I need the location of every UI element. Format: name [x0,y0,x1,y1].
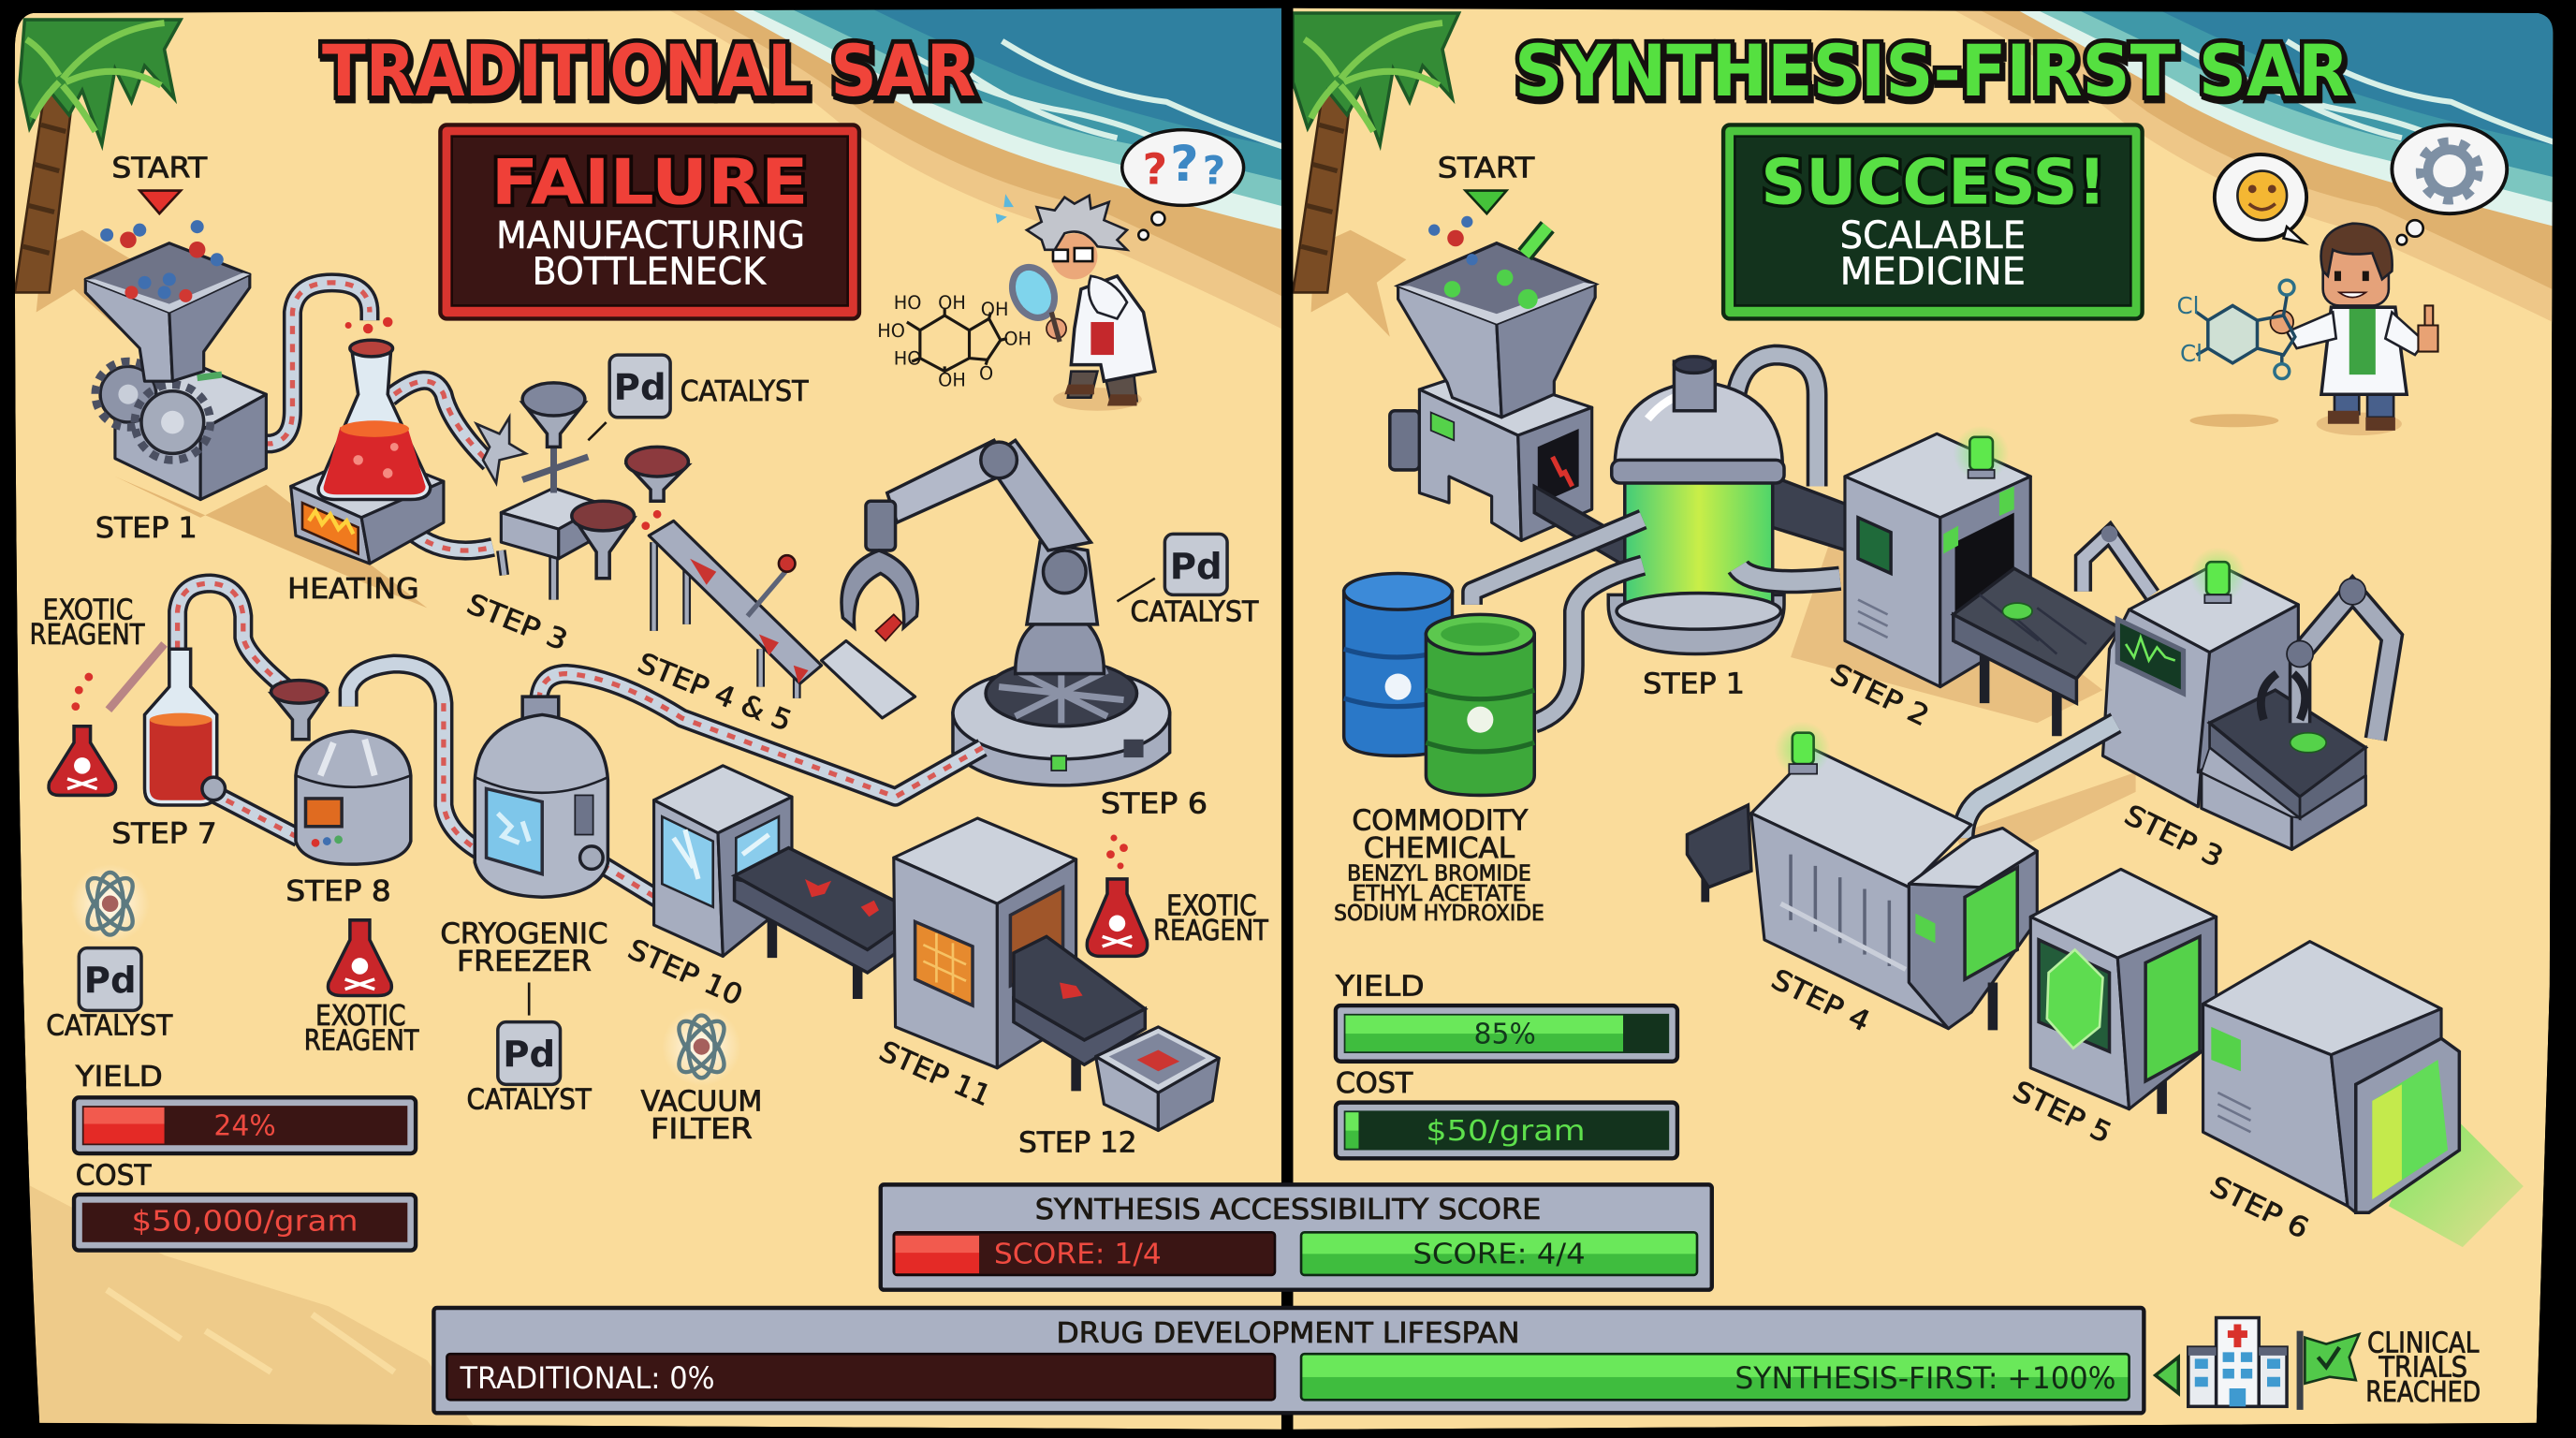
label commodity chemical: CHEMICAL [1364,832,1515,865]
conveyor step 11 to bin [1014,936,1145,1091]
funnel: step 3 lower [572,501,634,579]
label commodity chemical: COMMODITY [1352,804,1529,837]
label heating: HEATING [287,573,419,606]
label step 7: STEP 7 [111,817,217,850]
reaction flask [318,317,431,500]
step 3 output conveyor [2202,690,2365,849]
chute steps 4 and 5 [649,521,915,718]
step 1 shadow [115,477,427,608]
thought bubble: question marks: ? [1203,148,1225,194]
label step 3: STEP 3 [462,588,572,657]
label step 5: STEP 5 [2008,1075,2116,1151]
thought bubble: question marks: ? [1170,136,1199,193]
stat: synthesis cost bar: COST [1336,1067,1413,1100]
label step 4 and 5: STEP 4 & 5 [633,647,796,739]
conveyor step 2 to 3 [1954,568,2119,736]
arrow: to clinical trials [2156,1357,2178,1393]
label cryogenic freezer: FREEZER [457,946,592,978]
molecule: traditional complex polyol: O [979,362,993,384]
label clinical trials reached [2365,1327,2481,1409]
pipes from barrels [1472,520,1840,723]
lifespan bar synthesis: SYNTHESIS-FIRST: +100% [1734,1362,2116,1396]
label exotic reagent top: REAGENT [30,619,145,652]
robot arm step 6 [842,440,1170,785]
pipe: reactor overhead [1734,355,1817,486]
callout: success sign: SUCCESS! [1761,146,2106,219]
stat: synthesis yield bar: 85% [1474,1018,1536,1050]
hopper feeder machine [1390,216,1595,540]
scientist: confused with magnifier [996,194,1155,411]
pipe: step 3 to step 4 [1963,723,2116,838]
cryogenic freezer vessel [475,697,607,897]
title: Synthesis-First SAR: SYNTHESIS-FIRST SAR [1515,30,2349,112]
beacon step 4 [1774,721,1830,777]
icon: palladium catalyst chip freezer: Pd [503,1034,555,1076]
label catalyst left: CATALYST [46,1010,173,1043]
connector: Pd to robot [1117,579,1155,601]
reactor step 1 [1608,357,1784,654]
stat: traditional yield bar [74,1061,416,1153]
funnel: step 3 upper [522,383,585,447]
stat: synthesis yield bar: YIELD [1335,971,1425,1004]
panel: traditional SAR beach background [0,0,1298,1438]
score bar traditional [894,1232,1275,1275]
molecule: simple scalable scaffold [2176,280,2295,379]
label exotic reagent lower: EXOTIC [315,1000,406,1033]
score bar traditional: SCORE: 1/4 [994,1239,1162,1271]
beacon step 2 [1954,426,2009,481]
step 3 mixing table [476,418,603,600]
label start: START [111,153,208,185]
label start: START [1438,153,1535,185]
label exotic reagent top [30,594,145,652]
molecule: traditional complex polyol: OH [981,299,1009,320]
funnel: step 4 [626,447,688,530]
chart: traditional process machines, lower row [49,583,1219,1130]
label clinical trials reached: CLINICAL [2367,1327,2480,1359]
callout: success sign: SCALABLE [1840,213,2026,257]
label commodity chemical: BENZYL BROMIDE [1347,862,1531,887]
heating base [291,452,444,564]
icon: hospital [2188,1318,2287,1406]
label vacuum filter: VACUUM [641,1085,762,1118]
thought bubble: question marks: ? [1143,145,1167,195]
scientist: happy thumbs up [2190,224,2438,435]
label exotic reagent lower [304,1000,419,1057]
panel: synthesis accessibility score [881,1184,1712,1290]
panel: drug development lifespan [433,1308,2144,1413]
label step 6: STEP 6 [1101,788,1208,821]
callout: success sign [1723,125,2143,318]
belt hopper to reactor [1534,486,1627,566]
lifespan bar traditional: TRADITIONAL: 0% [460,1362,714,1396]
label commodity chemical: SODIUM HYDROXIDE [1334,902,1544,926]
label commodity chemical [1334,804,1544,926]
pipe: grinder to flask [239,283,370,444]
label clinical trials reached: REACHED [2365,1376,2481,1409]
reagent flask lower-left [328,920,391,996]
label step 10: STEP 10 [622,933,747,1013]
step 1 grinder machine [85,220,266,500]
label vacuum filter [641,1085,762,1146]
score bar synthesis: SCORE: 4/4 [1412,1239,1586,1271]
molecule chlorine labels: Cl [2176,292,2199,319]
exotic reagent flask with skull [49,673,116,795]
panel: synthesis-first SAR beach background [1281,0,2576,1438]
molecule: traditional complex polyol: HO [894,348,921,370]
thought bubble: gear [2392,125,2507,244]
labels: traditional panel [30,153,1269,1159]
icon: green check flag [2300,1331,2359,1410]
chart: traditional process machines, upper row [85,220,1170,785]
icon: palladium catalyst chip lower-left: Pd [84,960,137,1002]
conveyor step 10 to 11 [735,848,920,999]
label cryogenic freezer [440,917,607,978]
stat: synthesis yield bar [1335,971,1677,1062]
robot arm step 3 right [2261,579,2392,740]
stat: traditional cost bar: $50,000/gram [131,1206,359,1239]
molecule: traditional complex polyol: OH [938,292,966,314]
stat: traditional yield bar: 24% [213,1110,276,1143]
icon: palladium catalyst chip top: Pd [614,366,666,408]
step 2 machine [1845,433,2030,687]
barrel blue [1344,574,1453,756]
step 6 machine [2203,942,2524,1247]
label step 11: STEP 11 [874,1035,996,1113]
step 11 oven machine [894,818,1076,1068]
callout: failure sign: BOTTLENECK [533,250,767,294]
label step 1: STEP 1 [95,512,198,545]
funnel: step 8 inlet [271,681,327,740]
step 8 vessel [296,731,411,864]
label step 3: STEP 3 [2119,799,2228,874]
thought bubble: question marks [1122,130,1244,240]
label step 8: STEP 8 [285,875,391,908]
score bar synthesis [1301,1232,1697,1275]
label exotic reagent top: EXOTIC [43,594,133,627]
right shadows [1791,493,2136,871]
step 7 vessel [145,649,225,805]
pipe: flask to step 3 [389,380,493,550]
stat: synthesis cost bar: $50/gram [1426,1115,1586,1148]
connector: freezer to Pd [528,983,530,1016]
label exotic reagent right: REAGENT [1153,915,1269,947]
belt behind reactor [1773,477,1847,550]
label step 1: STEP 1 [1643,668,1745,701]
icon: palladium catalyst chip robot: Pd [1170,546,1222,588]
molecule: traditional complex polyol: OH [938,369,966,390]
step 4 machine [1751,749,2037,1029]
lifespan heading: DRUG DEVELOPMENT LIFESPAN [1057,1317,1519,1350]
stat: traditional yield bar: YIELD [75,1061,163,1093]
lifespan bar traditional [446,1354,1275,1400]
label step 6: STEP 6 [2204,1170,2314,1246]
molecule: traditional complex polyol [877,292,1032,390]
speech bubble: smiley [2215,154,2306,243]
label exotic reagent lower: REAGENT [304,1024,419,1057]
small robot arm step 3 [2083,526,2152,594]
arrow: start red [139,191,181,213]
pipe: step 7 arch [109,583,299,710]
arrow: start green [1466,191,1506,213]
lifespan bar synthesis [1301,1354,2130,1400]
step 10 machine [654,766,792,956]
barrel green [1426,614,1534,795]
reagent flask near step 11 [1087,835,1148,956]
pipe: step 6 to cryo [539,674,983,797]
callout: success sign: MEDICINE [1840,250,2026,294]
connector: Pd to step 3 [588,422,607,440]
stat: traditional cost bar [74,1159,416,1251]
label exotic reagent right [1153,890,1269,947]
label catalyst robot: CATALYST [1131,595,1259,628]
labels: synthesis-first panel [1334,153,2314,1246]
label step 12: STEP 12 [1018,1126,1137,1159]
callout: failure sign: FAILURE [491,146,809,219]
icon: atom catalyst left [71,864,150,943]
stat: synthesis cost bar [1336,1067,1677,1158]
label step 4: STEP 4 [1766,963,1875,1038]
step 5 machine [1993,869,2217,1114]
callout: failure sign: MANUFACTURING [496,213,805,257]
pipe: step 8 to cryo [211,664,661,901]
beacon step 3 [2190,547,2246,603]
icon: right palm tree [1293,13,1459,292]
center divider [1281,0,1293,1438]
molecule: traditional complex polyol: OH [1003,329,1032,350]
label clinical trials reached: TRIALS [2378,1352,2467,1385]
label cryogenic freezer: CRYOGENIC [440,917,607,950]
chart: synthesis-first process machines [1344,216,2524,1247]
icon: atom vacuum filter [662,1007,741,1086]
title: Traditional SAR: TRADITIONAL SAR [322,30,976,112]
icon: palladium catalyst chip top [609,355,670,418]
step 4 conveyor [1687,805,1751,902]
label catalyst: CATALYST [681,375,809,408]
label vacuum filter: FILTER [651,1113,753,1146]
label catalyst freezer: CATALYST [466,1084,593,1117]
label commodity chemical: ETHYL ACETATE [1352,882,1526,906]
label step 2: STEP 2 [1825,657,1934,733]
icon: palladium catalyst chip robot [1164,534,1227,594]
icon: palladium catalyst chip freezer [498,1022,561,1084]
icon: palladium catalyst chip lower-left [79,948,141,1010]
step 3 machine [2102,564,2298,807]
callout: failure sign [440,125,859,318]
icon: left palm tree [15,20,181,292]
label exotic reagent right: EXOTIC [1166,890,1257,923]
molecule groups: HO [894,292,921,314]
output bin [1096,1027,1219,1130]
molecule: traditional complex polyol: HO [877,320,905,342]
stat: traditional cost bar: COST [76,1159,152,1192]
molecule: simple scalable scaffold: Cl [2180,340,2203,367]
score heading: SYNTHESIS ACCESSIBILITY SCORE [1035,1194,1541,1226]
